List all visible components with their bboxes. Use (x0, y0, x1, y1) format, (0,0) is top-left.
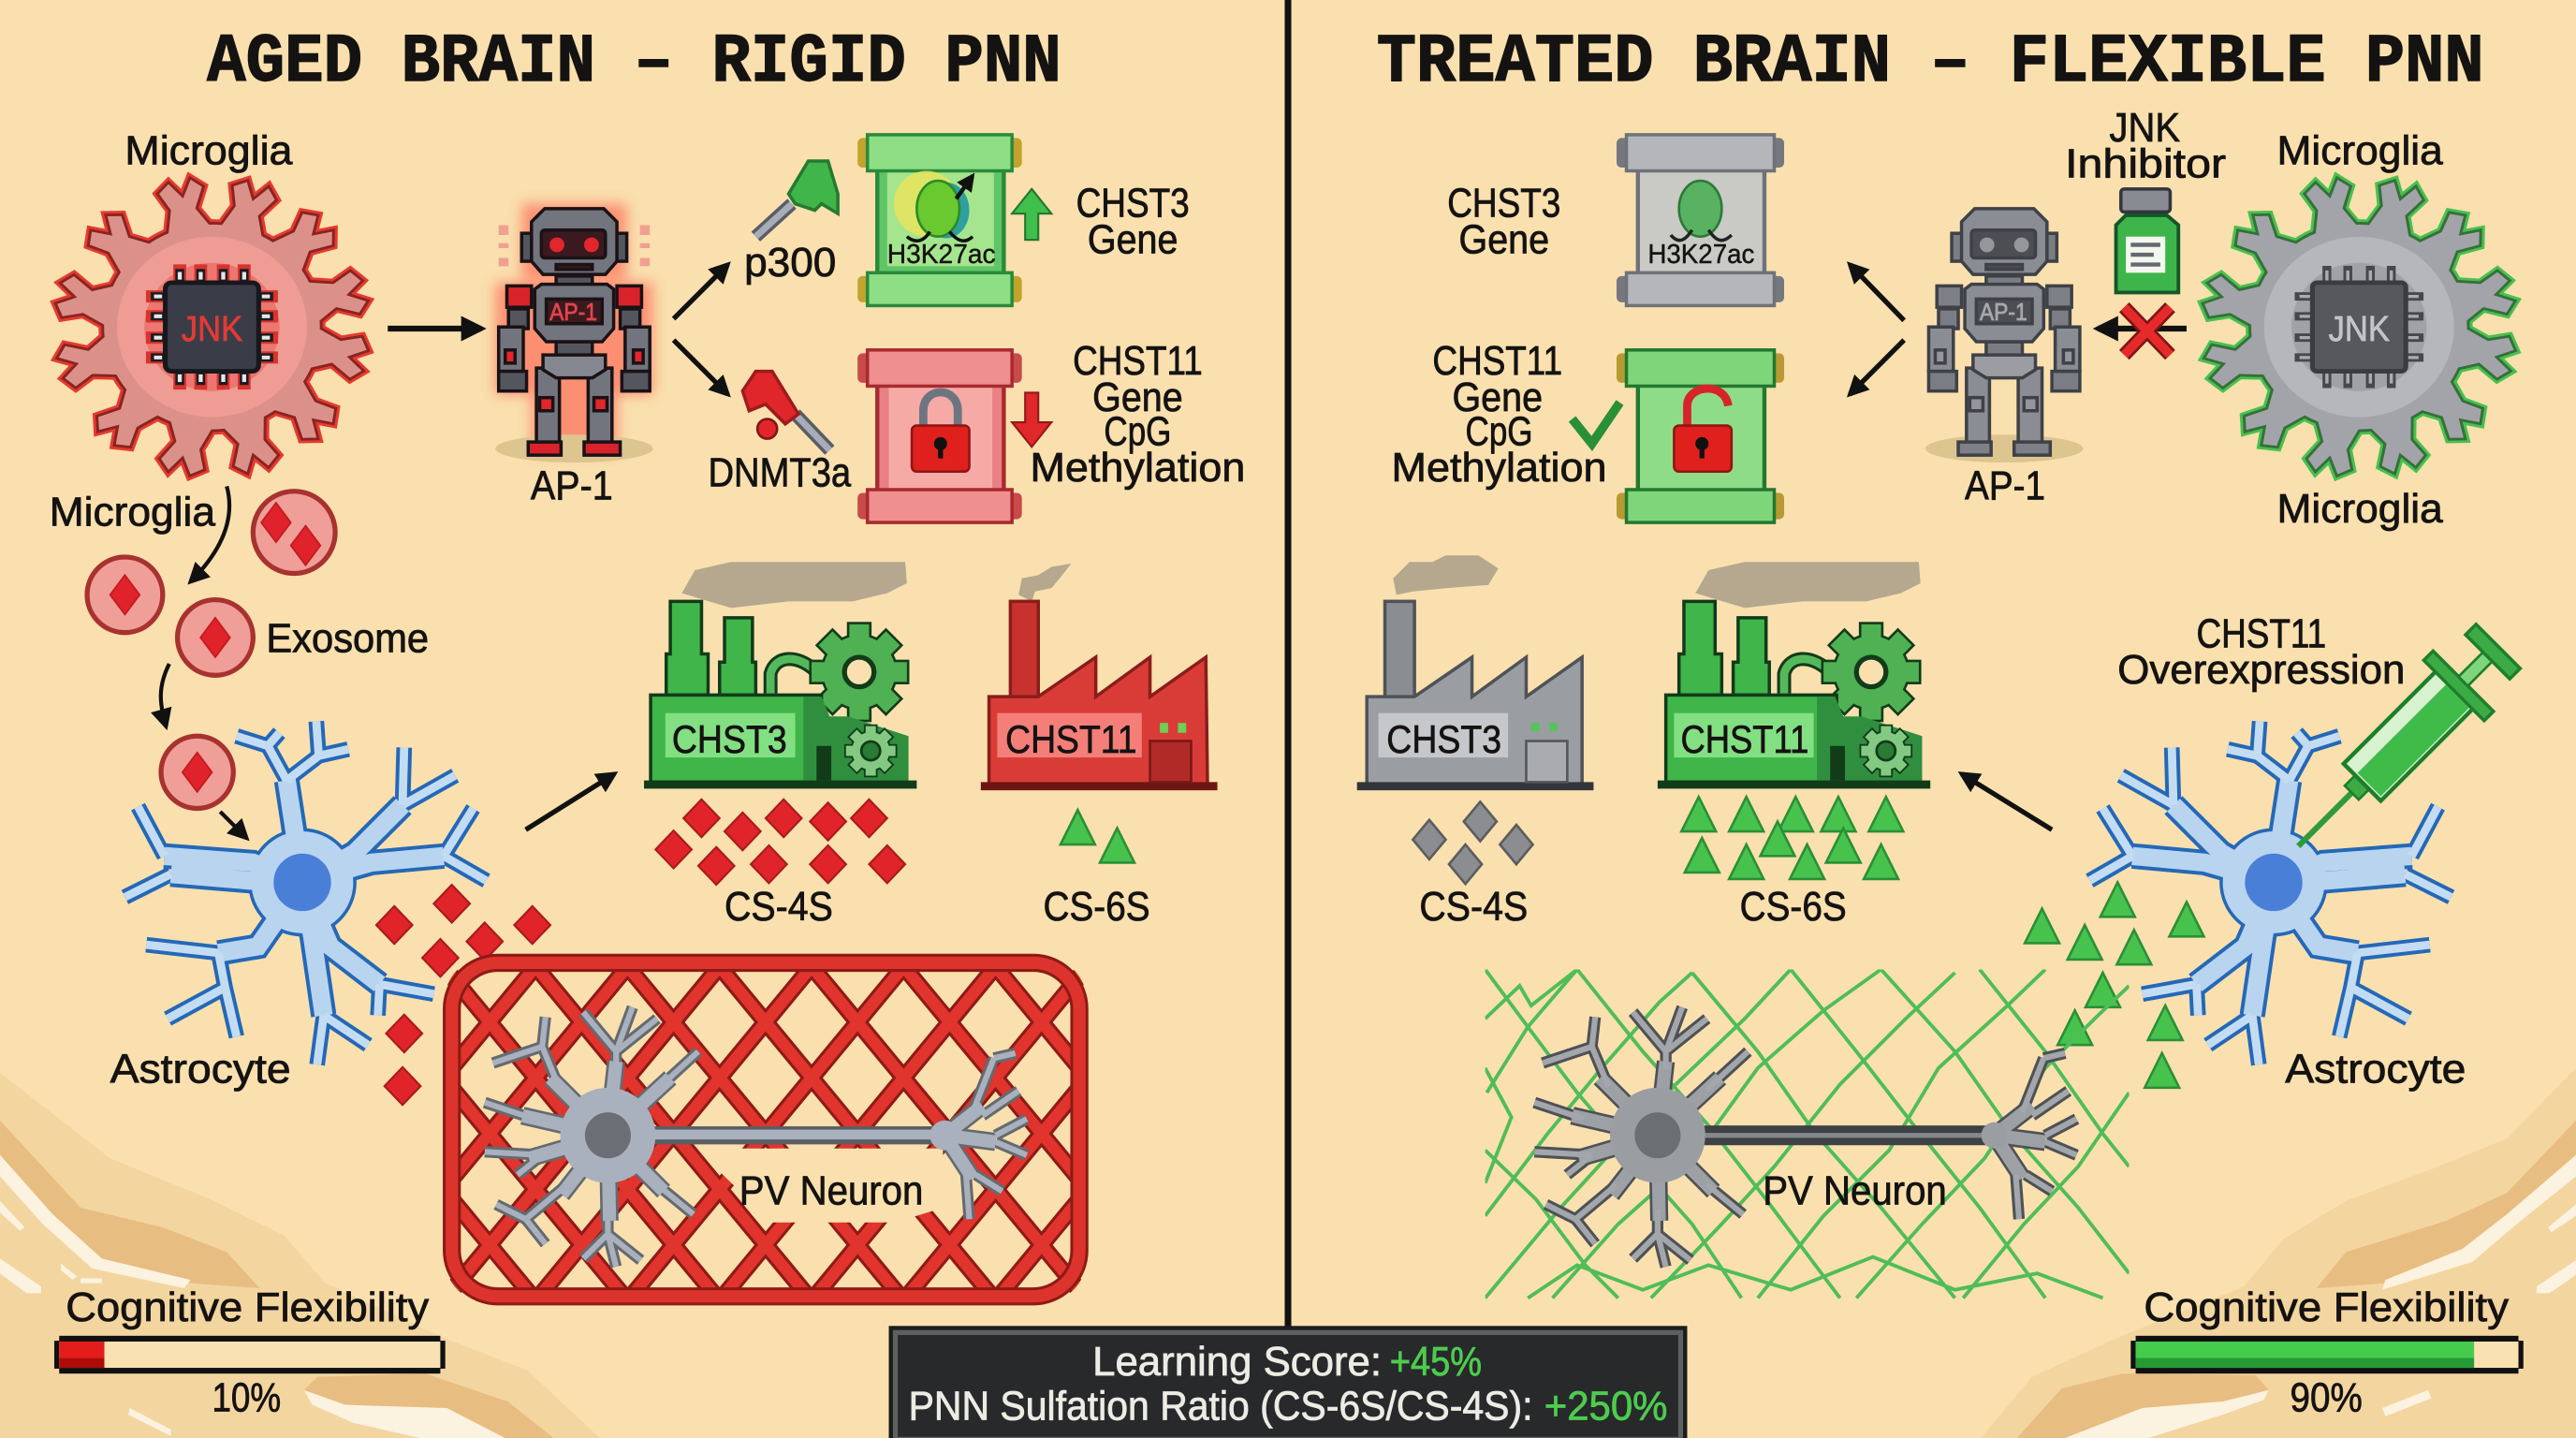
label: CHST11 gene CpG methylation: CHST11 (1073, 338, 1203, 384)
icon: grey CHST3 factory (1357, 555, 1593, 790)
CS-4S grey diamonds (1412, 801, 1532, 884)
label: PV neuron: PV Neuron (739, 1167, 923, 1213)
label: CHST11 overexpression (2117, 610, 2405, 693)
PV neuron (1534, 1007, 2076, 1267)
label: CHST11 overexpression: CHST11 (2197, 610, 2326, 656)
cognitive flexibility meter: 10%: 10% (212, 1375, 281, 1421)
label: CHST3 gene: CHST3 (1447, 181, 1560, 227)
icon: green CHST3 factory: CHST3 (672, 717, 787, 761)
flexible perineuronal net (1486, 969, 2130, 1298)
label: JNK inhibitor (2065, 105, 2226, 187)
released CS-4S diamonds (376, 885, 550, 1105)
label: microglia source: Microglia (50, 490, 216, 536)
label: p300: p300 (744, 240, 836, 286)
label: CHST3 gene (1447, 181, 1560, 262)
arrows: exosome trafficking (161, 486, 246, 838)
label: CS-4S: CS-4S (1419, 884, 1528, 930)
label: microglia: Microglia (124, 128, 293, 174)
label: CHST11 gene CpG methylation: Methylation (1392, 445, 1606, 491)
label: CS-6S: CS-6S (1044, 884, 1150, 930)
icon: green CHST11 factory (1658, 562, 1930, 788)
label: astrocyte: Astrocyte (110, 1047, 291, 1093)
label: CHST3 gene: Gene (1088, 216, 1178, 262)
label: CHST11 gene CpG methylation (1030, 338, 1245, 491)
label: CHST3 gene: Gene (1459, 216, 1549, 262)
arrow: AP-1 to p300 (674, 265, 728, 318)
icon: activated AP-1 robot (495, 204, 653, 462)
label: DNMT3a: DNMT3a (708, 449, 852, 495)
icon: locked gene scroll (857, 350, 1022, 522)
icon: astrocyte (124, 721, 487, 1064)
panel: results summary (889, 1326, 1687, 1438)
icon: inactive microglia with JNK chip (2202, 177, 2517, 477)
label: exosome: Exosome (266, 616, 429, 662)
sulfation ratio line: +250% (1544, 1383, 1667, 1429)
icon: active chromatin scroll: H3K27ac (887, 240, 996, 270)
label: microglia top: Microglia (2277, 128, 2443, 174)
arrow: AP-1 to DNMT3a (674, 340, 728, 394)
title: aged brain: AGED BRAIN – RIGID PNN (207, 24, 1061, 102)
icon: check mark (1573, 403, 1620, 444)
panel: aged brain (50, 24, 1373, 1421)
CS-6S triangles produced (1061, 810, 1134, 862)
icon: down arrow (1012, 392, 1051, 447)
icon: active chromatin scroll (857, 135, 1022, 305)
label: AP-1: AP-1 (1965, 463, 2045, 509)
icon: grey CHST3 factory: CHST3 (1386, 717, 1501, 761)
icon: inactive chromatin scroll: H3K27ac (1647, 240, 1754, 270)
released CS-6S triangles (2025, 882, 2203, 1088)
label: CS-4S: CS-4S (724, 884, 833, 930)
icon: astrocyte (2089, 721, 2452, 1064)
icon: DNMT3a enzyme (742, 372, 829, 450)
icon: red X inner (2124, 307, 2170, 355)
label: JNK inhibitor: Inhibitor (2065, 141, 2226, 187)
icon: red X block (2124, 307, 2170, 355)
icon: up arrow (1012, 189, 1051, 240)
label: CHST11 gene CpG methylation: CHST11 (1432, 338, 1562, 384)
icon: red CHST11 factory (981, 564, 1218, 790)
icon: green CHST3 factory (644, 562, 916, 788)
label: CHST11 gene CpG methylation (1392, 338, 1606, 491)
learning score line: +45% (1390, 1339, 1482, 1385)
label: CHST11 gene CpG methylation: Gene (1453, 374, 1543, 420)
learning score line: Learning Score: (1092, 1339, 1382, 1385)
background sand dunes bottom right (1980, 1068, 2576, 1438)
icon: activated microglia with JNK chip: JNK (182, 310, 242, 349)
cognitive flexibility meter: 10%: Cognitive Flexibility (66, 1284, 429, 1330)
panel: treated brain (1357, 24, 2528, 1421)
icon: inactive AP-1 robot: AP-1 (1980, 298, 2027, 326)
icon: inactive microglia with JNK chip: JNK (2329, 310, 2390, 349)
arrow: blocked JNK signal (2098, 327, 2187, 330)
label: CHST11 overexpression: Overexpression (2117, 647, 2405, 693)
icon: activated AP-1 robot: AP-1 (549, 298, 597, 326)
label: CHST11 gene CpG methylation: CpG (1104, 409, 1171, 455)
arrow: astrocyte to CHST11 factory (1962, 774, 2052, 829)
CS-6S triangles produced (1681, 797, 1903, 879)
arrow: AP-1 to CHST3 scroll (1850, 265, 1904, 320)
PV neuron inside net (485, 1007, 1027, 1267)
cognitive flexibility meter: 90%: Cognitive Flexibility (2144, 1284, 2509, 1330)
label: CHST11 gene CpG methylation: Methylation (1030, 445, 1245, 491)
label: AP-1: AP-1 (531, 463, 613, 509)
cognitive flexibility meter: 90% (2130, 1284, 2524, 1421)
cognitive flexibility meter: 90%: 90% (2291, 1375, 2363, 1421)
label: PV neuron: PV Neuron (1763, 1167, 1947, 1213)
arrow: astrocyte to CHST3 factory (526, 774, 614, 829)
icon: green CHST11 factory: CHST11 (1680, 717, 1808, 761)
arrow: microglia to AP-1 (388, 327, 481, 330)
label: CS-6S: CS-6S (1740, 884, 1847, 930)
icon: syringe (2268, 616, 2528, 876)
label: JNK inhibitor: JNK (2110, 105, 2180, 151)
arrow: AP-1 to CHST11 scroll (1850, 340, 1904, 394)
icon: inactive AP-1 robot (1925, 209, 2083, 462)
icon: activated microglia with JNK chip (54, 177, 370, 477)
background sand dunes bottom left (0, 1073, 601, 1438)
label: CHST11 gene CpG methylation: CpG (1466, 409, 1532, 455)
label: microglia bottom: Microglia (2277, 486, 2443, 532)
icon: exosomes (87, 492, 335, 808)
icon: JNK inhibitor vial (2116, 189, 2178, 292)
label: CHST11 gene CpG methylation: Gene (1092, 374, 1183, 420)
CS-4S diamonds produced (655, 800, 905, 885)
label: astrocyte: Astrocyte (2285, 1047, 2466, 1093)
icon: p300 enzyme (755, 161, 838, 237)
panel divider (1284, 0, 1292, 1328)
sulfation ratio line: PNN Sulfation Ratio (CS-6S/CS-4S): (909, 1383, 1532, 1429)
icon: red CHST11 factory: CHST11 (1005, 717, 1137, 761)
label: CHST3 gene (1076, 181, 1190, 262)
icon: inactive chromatin scroll (1617, 135, 1784, 305)
icon: unlocked gene scroll (1617, 350, 1784, 522)
rigid perineuronal net (443, 953, 1089, 1305)
title: treated brain: TREATED BRAIN – FLEXIBLE PNN (1377, 24, 2484, 102)
cognitive flexibility meter: 10% (54, 1284, 446, 1421)
label: CHST3 gene: CHST3 (1076, 181, 1190, 227)
